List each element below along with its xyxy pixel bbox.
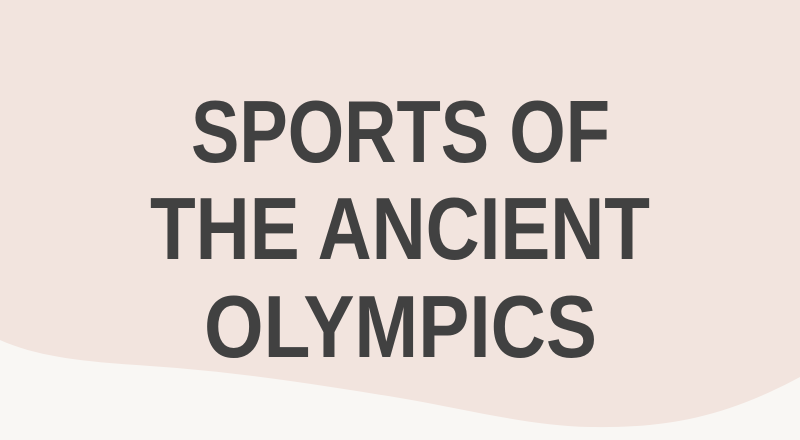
title: SPORTS OF [191, 82, 610, 181]
title: THE ANCIENT [150, 179, 650, 278]
bottom wave [0, 340, 800, 440]
title [150, 82, 650, 376]
title: OLYMPICS [204, 277, 597, 376]
